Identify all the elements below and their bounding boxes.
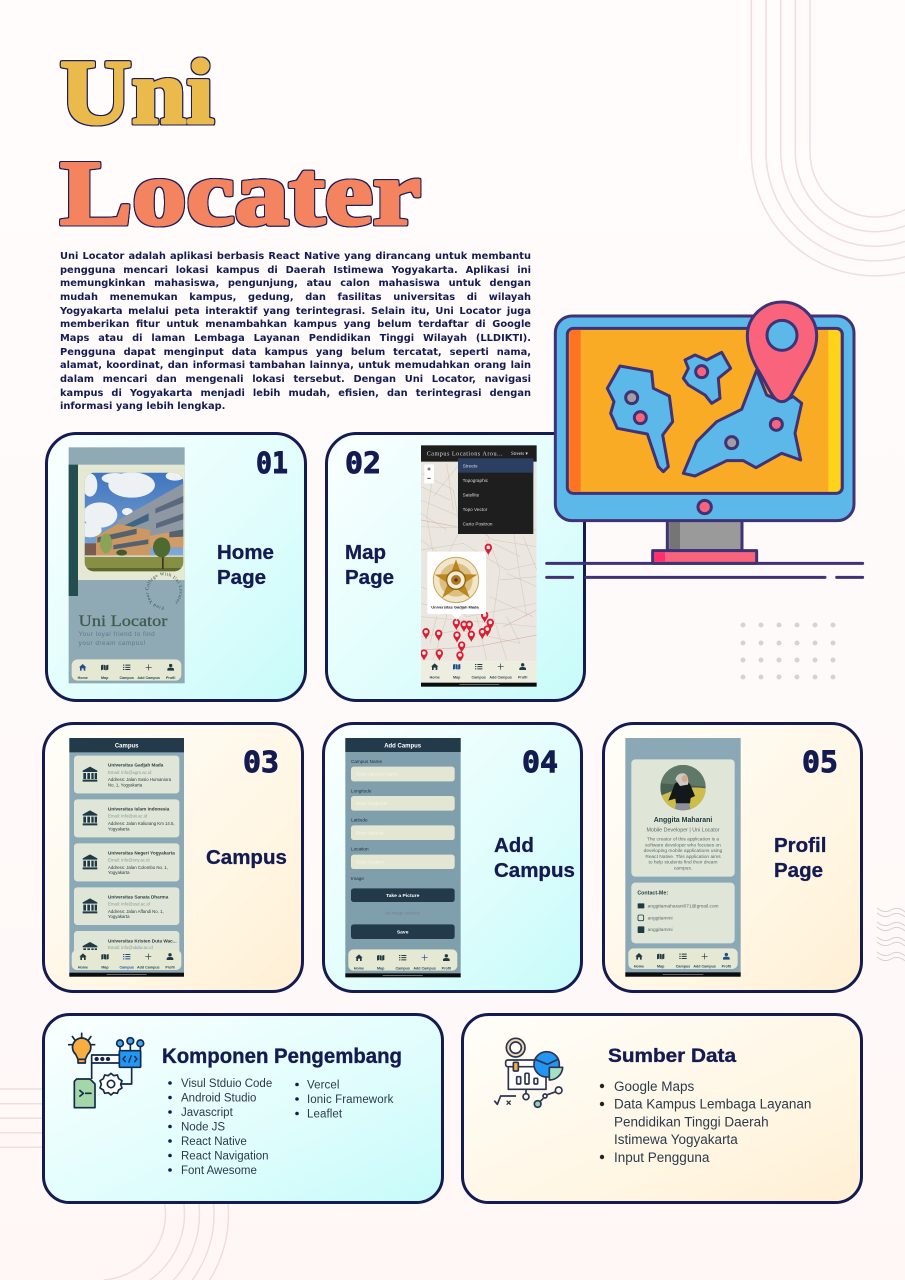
tab bar: Home (430, 675, 440, 679)
campus list cards: Yogyakarta (108, 870, 130, 875)
label: Map Page: Map (345, 541, 386, 564)
buttons: Take a Picture (386, 893, 420, 899)
form fields: Campus Name (351, 759, 382, 764)
form fields: Enter campus name (356, 772, 398, 777)
app name: Uni Locator (79, 613, 168, 630)
form fields: Latitude (351, 818, 368, 823)
campus list cards (74, 756, 179, 969)
card background (324, 724, 582, 992)
title (60, 41, 421, 244)
tab bar: Map (377, 966, 385, 970)
card background (604, 724, 862, 992)
tab bar: Campus (395, 966, 410, 970)
tab bar: Add Campus (489, 675, 512, 679)
tab bar: Add Campus (137, 676, 160, 680)
tab bar: Campus (119, 676, 134, 680)
campus photo (78, 471, 184, 571)
tab bar: Home (78, 965, 88, 969)
campus list cards: Email: info@ugm.ac.id (108, 770, 152, 775)
tab bar: Add Campus (413, 966, 436, 970)
label: Map Page (345, 541, 394, 589)
description paragraph: pengguna mencari lokasi kampus di Daerah Istimewa Yogyakarta. Aplikasi ini (60, 265, 531, 276)
tab bar: Profil (442, 966, 451, 970)
location pin (747, 302, 817, 402)
campus list cards: Email: info@ukdw.ac.id (108, 945, 153, 950)
map island right (683, 370, 802, 476)
tab bar: Profil (165, 965, 175, 969)
decorative arcs top right (751, 0, 905, 276)
list: Google Maps (614, 1079, 695, 1094)
map background (420, 462, 537, 663)
panel: 02 map page (326, 434, 584, 700)
form fields: Enter longitude (356, 801, 388, 806)
decorative dot grid (740, 622, 836, 680)
list: Data Kampus Lembaga Layanan (614, 1097, 811, 1112)
icon: data analysis (494, 1038, 563, 1107)
title line: Uni: Uni (60, 41, 214, 143)
panel: komponen pengembang (44, 1014, 442, 1202)
tab bar (69, 950, 184, 977)
heading: Sumber Data (608, 1045, 736, 1067)
tab bar: Profil (166, 676, 175, 680)
form fields: Longitude (351, 788, 372, 793)
icon: monitor with map and pin (547, 302, 863, 577)
label: Home Page (217, 541, 274, 589)
layer dropdown: Satellite (463, 493, 480, 498)
campus list cards: Email: info@usd.ac.id (108, 902, 151, 907)
campus list cards: Yogyakarta (108, 826, 130, 831)
tab bar: Add Campus (137, 965, 160, 969)
label: Map Page: Page (345, 566, 394, 589)
form fields: Location (351, 847, 369, 852)
tab bar: Home (354, 966, 364, 970)
layer dropdown: Topographic (463, 478, 489, 483)
header (69, 738, 184, 752)
list column two: Ionic Framework (307, 1094, 394, 1106)
app tagline: your dream campus! (79, 640, 146, 647)
campus list cards: Address: Jalan Affandi No. 1, (108, 909, 164, 914)
label: Home Page: Home (217, 541, 274, 564)
card background (46, 434, 306, 700)
tab bar: Map (453, 675, 461, 679)
layer dropdown: Carto Positron (463, 522, 493, 527)
tab bar: Profil (722, 965, 731, 969)
header: Add Campus (384, 743, 422, 749)
phone screenshot: add campus form (345, 738, 461, 977)
decorative arcs bottom left (0, 1089, 229, 1280)
campus list cards: Email: info@uny.ac.id (108, 858, 150, 863)
contact card: anggitammi (648, 927, 673, 933)
description paragraph: memungkinkan mahasiswa, pengunjung, atau calon mahasiswa untuk dengan (60, 278, 531, 289)
campus list cards: Address: Jalan Colombo No. 1, (108, 865, 168, 870)
profile card: Mobile Developer | Uni Locator (646, 827, 720, 833)
decorative squiggles (877, 908, 905, 961)
desk lines (547, 563, 863, 577)
panel: sumber data (462, 1014, 862, 1202)
list column one: Visul Stduio Code (181, 1078, 272, 1090)
heading: Komponen Pengembang (162, 1045, 402, 1068)
list column one (168, 1078, 272, 1177)
avatar photo (660, 765, 706, 810)
number 02: 02 (345, 446, 381, 480)
campus list cards: Universitas Kristen Duta Wac... (108, 938, 177, 943)
monitor body (555, 316, 854, 521)
map header: Campus Locations Arou... (427, 451, 503, 457)
campus list cards: Universitas Islam Indonesia (108, 806, 170, 811)
description paragraph: Pengguna dapat menginput data kampus yang belum tercatat, seperti nama, (60, 347, 531, 358)
app tagline (79, 631, 155, 647)
form fields: Image (351, 876, 364, 881)
form fields: Enter latitude (356, 830, 384, 835)
description paragraph: kampus di Yogyakarta menjadi lebih mudah, efisien, dan terintegrasi dengan (60, 388, 531, 399)
header: Campus (115, 744, 139, 750)
tab bar (345, 949, 461, 977)
tab bar (72, 659, 181, 681)
phone screenshot: campus list (69, 738, 184, 977)
list column two: Leaflet (307, 1108, 343, 1120)
list column one: Javascript (181, 1107, 234, 1119)
campus list cards: No. 1, Yogyakarta (108, 782, 143, 787)
monitor screen (567, 328, 842, 493)
card background (44, 724, 302, 992)
label: Profil Page (774, 834, 826, 882)
buttons (351, 888, 455, 939)
circular badge text: Find Your College With Uni Locator (146, 572, 182, 610)
monitor base (653, 551, 757, 563)
zoom control (424, 464, 434, 483)
description paragraph: Yogyakarta melalui peta interaktif yang terintegrasi. Selain itu, Uni Locator juga (60, 306, 531, 317)
panel: 01 home page (45, 432, 307, 702)
map island left (607, 366, 673, 472)
list column two (295, 1080, 394, 1120)
profile card: developing mobile applications using (644, 848, 723, 854)
popup: Universitas Gadjah Mada: Universitas Gadjah Mada (431, 604, 479, 609)
campus list cards: Email: info@uii.ac.id (108, 814, 148, 819)
profile card: The creator of this application is a (647, 837, 719, 843)
header (345, 738, 461, 752)
campus list cards: Address: Jalan Sosio Humaniora (108, 777, 172, 782)
label: Home Page: Page (217, 566, 266, 589)
description paragraph: dalam mencari dan mengenali lokasi tersebut. Dengan Uni Locator, navigasi (60, 374, 531, 385)
map header: Streets ▾ (511, 452, 528, 457)
tab bar: Home (634, 965, 644, 969)
power button (698, 500, 711, 514)
profile card: to help students find their dream (649, 860, 717, 866)
tab bar (625, 948, 741, 977)
phone screenshot: map (420, 445, 537, 687)
campus list cards: Universitas Sanata Dharma (108, 894, 169, 899)
campus list cards: Address: Jalan Kaliurang Km 14.5, (108, 821, 175, 826)
popup: Universitas Gadjah Mada (427, 552, 486, 620)
contact card (631, 883, 735, 943)
number 01: 01 (256, 446, 288, 480)
profile card: software developer who focuses on (645, 842, 721, 848)
tab bar: Map (657, 965, 665, 969)
map island middle (683, 352, 731, 403)
contact card: anggitammi (648, 915, 673, 921)
tab bar: Add Campus (693, 965, 716, 969)
tab bar: Campus (471, 675, 486, 679)
map header (421, 445, 537, 462)
card background (462, 1014, 862, 1202)
label: Add Campus: Campus (494, 859, 575, 882)
list column one: Font Awesome (181, 1165, 257, 1177)
list column two: Vercel (307, 1080, 340, 1092)
tab bar: Map (101, 676, 109, 680)
description paragraph: memberikan fitur untuk menambahkan kampus yang belum terdaftar di Google (60, 319, 531, 330)
description paragraph: mudah menemukan kampus, gedung, dan fasilitas universitas di wilayah (60, 292, 531, 303)
profile card: campus. (674, 866, 692, 871)
tab bar: Campus (676, 965, 690, 969)
phone screenshot: home (68, 447, 185, 684)
number 04: 04 (522, 745, 558, 779)
description paragraph: Maps atau di laman Lembaga Layanan Pendidikan Tinggi Wilayah (LLDIKTI). (60, 333, 531, 344)
panel: 04 add campus (324, 724, 582, 992)
contact card: anggitamaharani071@gmail.com (648, 904, 719, 910)
app tagline: Your loyal friend to find (79, 631, 155, 638)
monitor stand (667, 520, 742, 551)
label: Add Campus (494, 834, 575, 882)
profile card: React Native. This application aims (645, 854, 721, 860)
tab bar: Home (78, 676, 88, 680)
buttons: No image selected (385, 910, 421, 915)
map pins (420, 544, 494, 663)
layer dropdown: Streets (463, 463, 478, 468)
campus list cards: Yogyakarta (108, 914, 130, 919)
list column one: React Navigation (181, 1150, 269, 1162)
description paragraph: informasi yang lebih lengkap. (60, 401, 225, 412)
label: Profil Page: Page (774, 859, 823, 882)
phone screenshot: profile (625, 738, 741, 977)
panel: 03 campus (44, 724, 302, 992)
campus list cards: Universitas Gadjah Mada (108, 762, 164, 767)
label: Profil Page: Profil (774, 834, 826, 857)
list (600, 1079, 811, 1165)
layer dropdown: Topo Vector (463, 507, 488, 512)
icon: developer tools (68, 1033, 144, 1108)
card background (44, 1014, 442, 1202)
title line: Locater: Locater (60, 142, 421, 244)
description paragraph: alamat, koordinat, dan informasi tambahan lainnya, untuk memudahkan orang lain (60, 360, 531, 371)
label: Add Campus: Add (494, 834, 534, 857)
description paragraph: Uni Locator adalah aplikasi berbasis React Native yang dirancang untuk membantu (60, 251, 531, 262)
form fields (351, 759, 455, 881)
campus list cards: Universitas Negeri Yogyakarta (108, 850, 175, 855)
buttons: Save (397, 930, 409, 936)
contact card: Contact-Me: (637, 891, 668, 897)
form fields: Enter location (356, 859, 385, 864)
tab bar: Profil (518, 675, 527, 679)
label: Campus: Campus (206, 846, 287, 869)
tab bar (421, 661, 537, 687)
card background (326, 434, 584, 700)
list column one: Node JS (181, 1122, 225, 1134)
list: Pendidikan Tinggi Daerah (614, 1114, 769, 1129)
list: Input Pengguna (614, 1150, 710, 1165)
number 05: 05 (802, 745, 838, 779)
tab bar: Campus (119, 965, 134, 969)
profile card (631, 759, 735, 877)
list column one: React Native (181, 1136, 247, 1148)
list: Istimewa Yogyakarta (614, 1132, 738, 1147)
layer dropdown (458, 458, 533, 534)
list column one: Android Studio (181, 1092, 256, 1104)
tab bar: Map (101, 965, 109, 969)
number 03: 03 (243, 745, 279, 779)
description paragraph (60, 251, 531, 412)
panel: 05 profil page (604, 724, 862, 992)
profile card: Anggita Maharani (654, 817, 712, 824)
